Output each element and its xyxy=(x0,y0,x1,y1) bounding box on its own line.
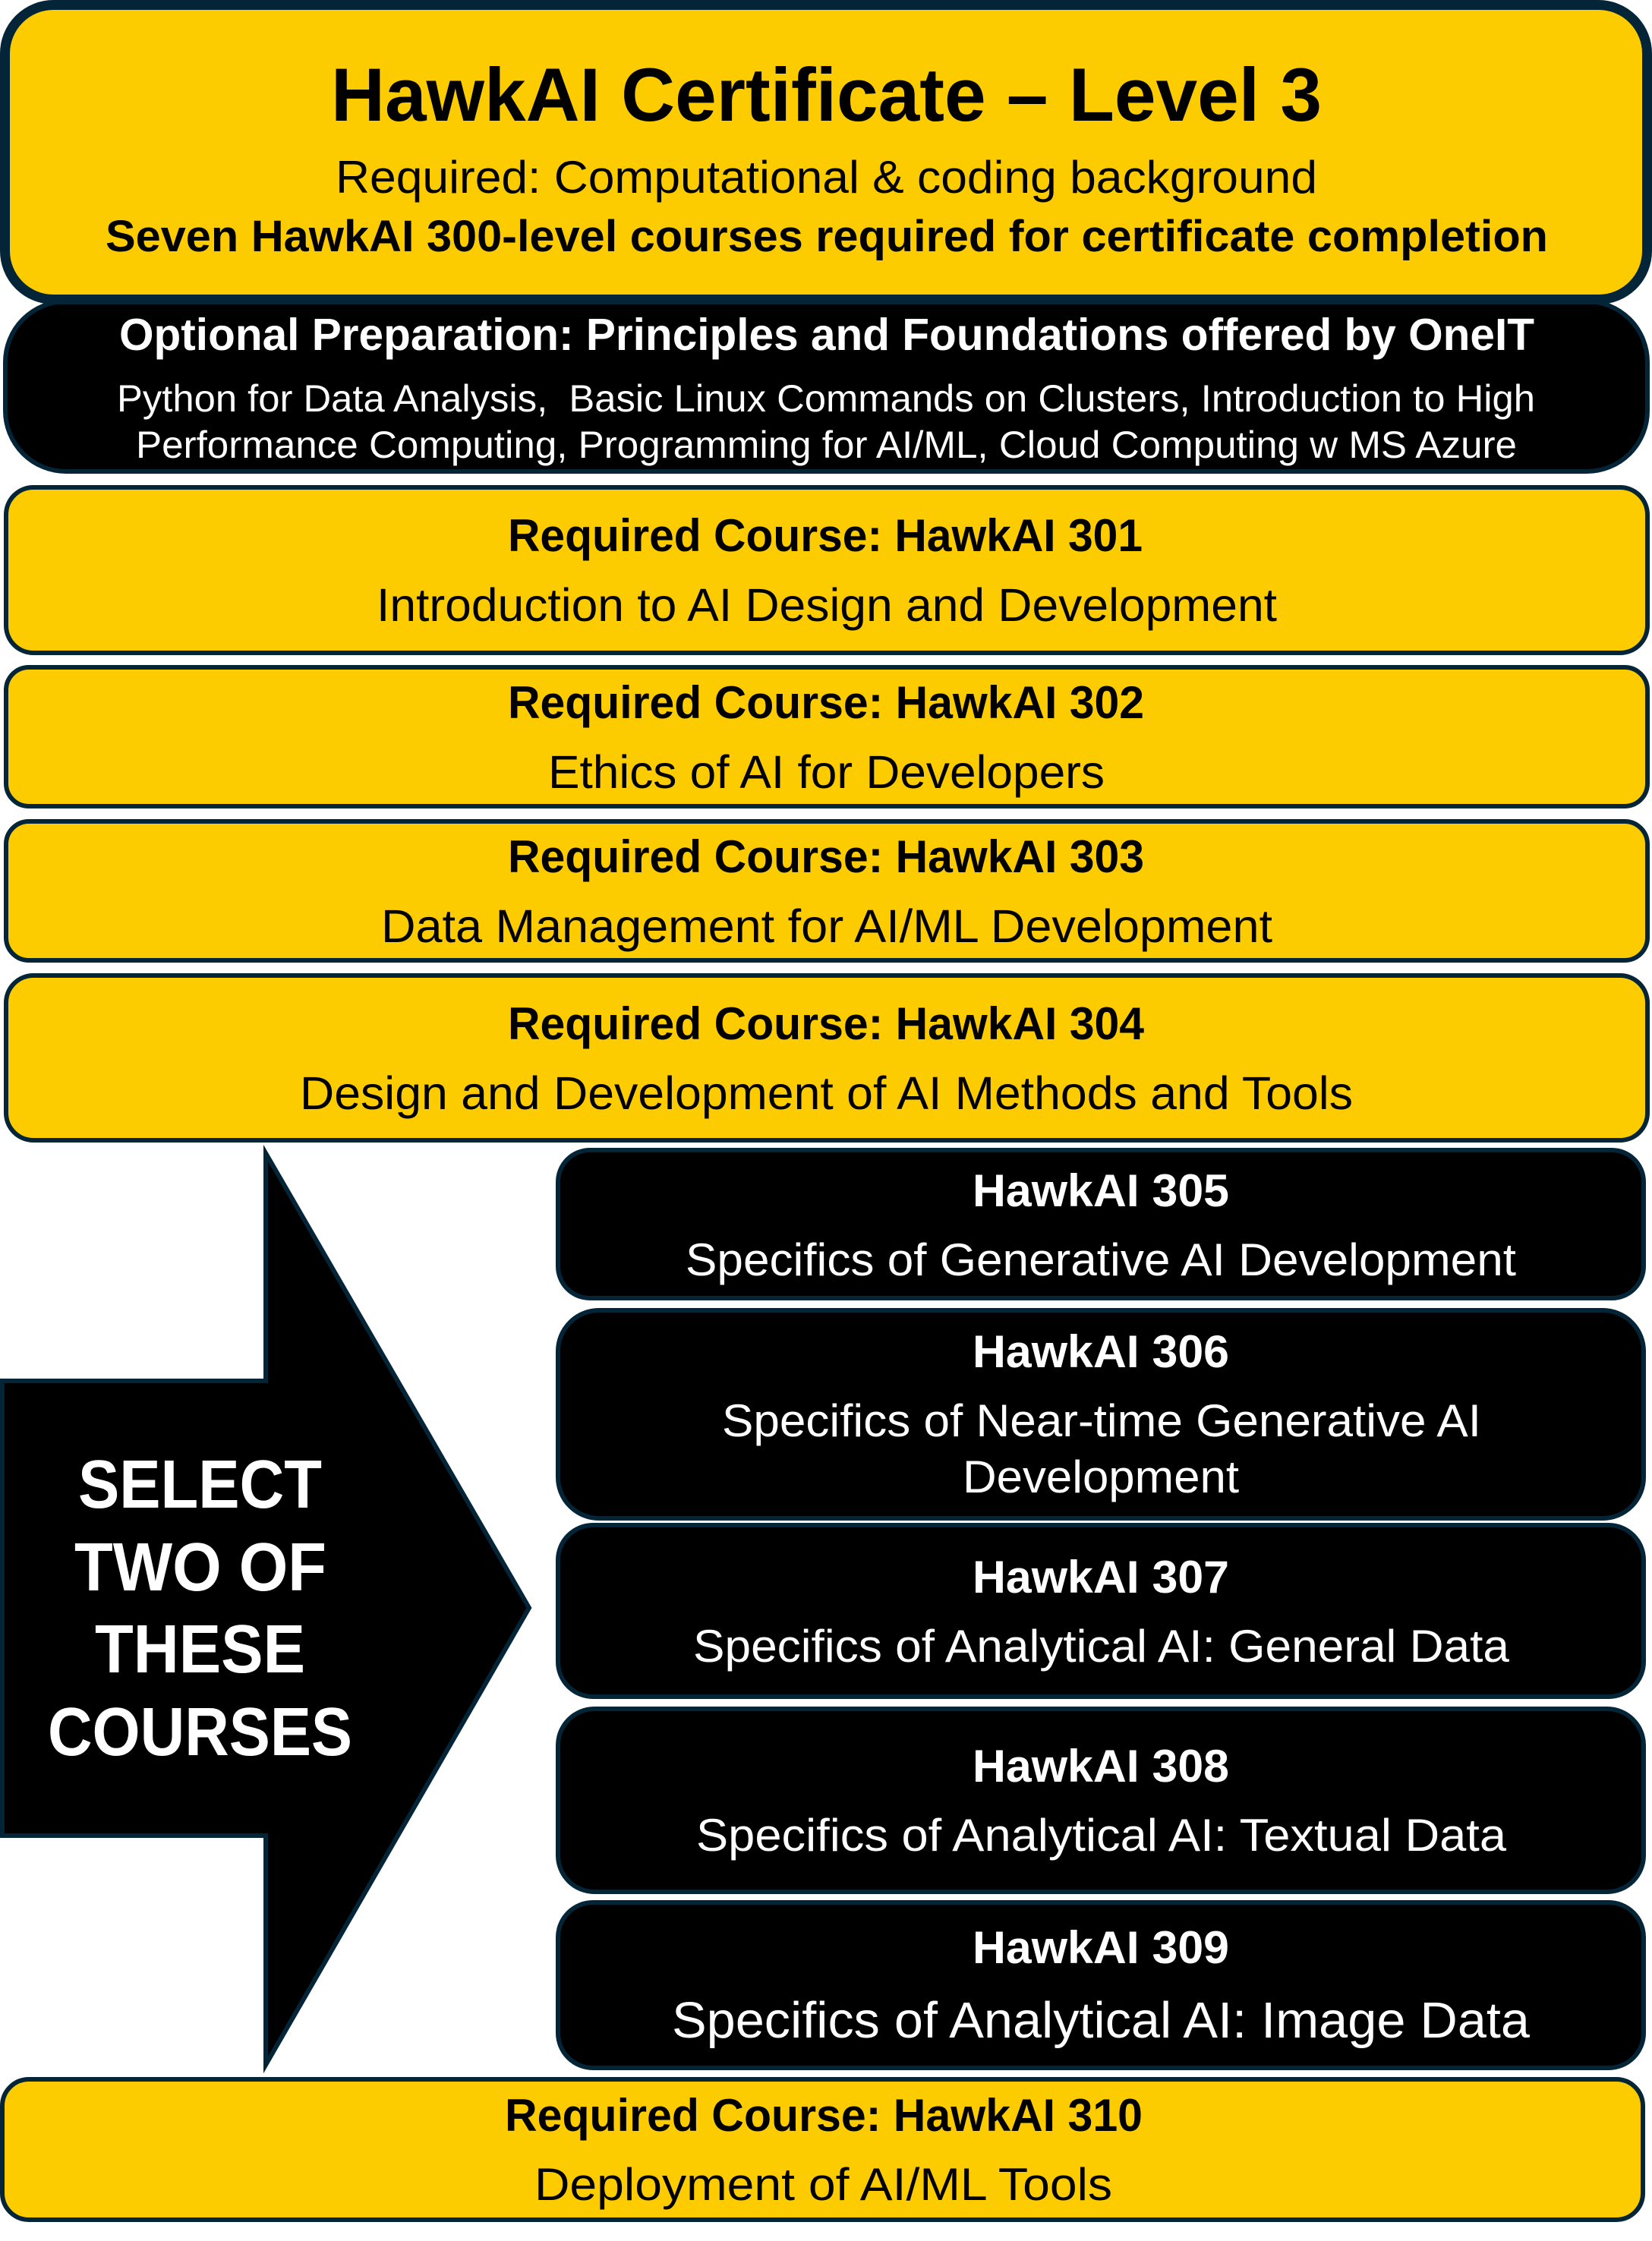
panel: HawkAI 306: Specifics of Near-time Generative AI xyxy=(722,1395,1481,1446)
optional preparation topics xyxy=(117,377,1535,466)
completion requirement line: Seven HawkAI 300-level courses required for certificate completion xyxy=(106,212,1548,261)
panel: HawkAI 307 xyxy=(558,1525,1644,1697)
requirement line: Required: Computational & coding background xyxy=(336,152,1317,203)
panel: HawkAI 306: HawkAI 306 xyxy=(973,1326,1229,1377)
panel: title banner xyxy=(5,5,1647,299)
panel: HawkAI 306: Development xyxy=(963,1451,1239,1502)
arrow: select two of these courses: SELECT xyxy=(78,1447,322,1523)
arrow: select two of these courses: COURSES xyxy=(48,1694,352,1770)
optional preparation topics: Performance Computing, Programming for AI/ML, Cloud Computing w MS Azure xyxy=(136,424,1517,466)
arrow: select two of these courses: TWO OF xyxy=(74,1530,326,1606)
panel: HawkAI 303 xyxy=(6,821,1647,960)
panel: optional preparation xyxy=(5,301,1647,471)
panel: HawkAI 301: Introduction to AI Design and Development xyxy=(377,579,1277,631)
optional preparation heading: Optional Preparation: Principles and Foundations offered by OneIT xyxy=(119,310,1534,360)
panel: HawkAI 302: Ethics of AI for Developers xyxy=(548,746,1105,798)
panel: HawkAI 304 xyxy=(6,976,1647,1140)
panel: HawkAI 309 xyxy=(558,1902,1644,2068)
panel: HawkAI 303: Data Management for AI/ML Development xyxy=(381,900,1272,952)
panel: HawkAI 310 xyxy=(2,2079,1643,2220)
panel: HawkAI 305: HawkAI 305 xyxy=(973,1165,1229,1216)
panel: HawkAI 310: Required Course: HawkAI 310 xyxy=(505,2090,1143,2141)
panel: HawkAI 310: Deployment of AI/ML Tools xyxy=(534,2159,1112,2210)
panel: HawkAI 308 xyxy=(558,1709,1644,1892)
title: HawkAI Certificate – Level 3 xyxy=(331,52,1322,137)
panel: HawkAI 308: HawkAI 308 xyxy=(973,1741,1229,1792)
panel: HawkAI 305: Specifics of Generative AI Development xyxy=(686,1234,1516,1285)
arrow: select two of these courses: THESE xyxy=(95,1612,305,1688)
arrow: select two of these courses xyxy=(2,1153,529,2065)
panel: HawkAI 302: Required Course: HawkAI 302 xyxy=(508,677,1144,728)
panel: HawkAI 309: Specifics of Analytical AI: Image Data xyxy=(672,1992,1531,2049)
panel: HawkAI 308: Specifics of Analytical AI: Textual Data xyxy=(696,1810,1507,1861)
panel: HawkAI 303: Required Course: HawkAI 303 xyxy=(508,831,1144,882)
panel: HawkAI 301 xyxy=(6,487,1647,653)
panel: HawkAI 301: Required Course: HawkAI 301 xyxy=(508,510,1143,561)
panel: HawkAI 309: HawkAI 309 xyxy=(973,1922,1229,1973)
panel: HawkAI 302 xyxy=(6,667,1647,806)
panel: HawkAI 307: Specifics of Analytical AI: General Data xyxy=(693,1621,1510,1672)
panel: HawkAI 305 xyxy=(558,1150,1644,1298)
panel: HawkAI 304: Design and Development of AI Methods and Tools xyxy=(300,1067,1353,1119)
optional preparation topics: Python for Data Analysis, Basic Linux Commands on Clusters, Introduction to High xyxy=(117,377,1535,420)
panel: HawkAI 307: HawkAI 307 xyxy=(973,1552,1229,1603)
panel: HawkAI 306 xyxy=(558,1310,1644,1518)
panel: HawkAI 304: Required Course: HawkAI 304 xyxy=(508,998,1145,1049)
